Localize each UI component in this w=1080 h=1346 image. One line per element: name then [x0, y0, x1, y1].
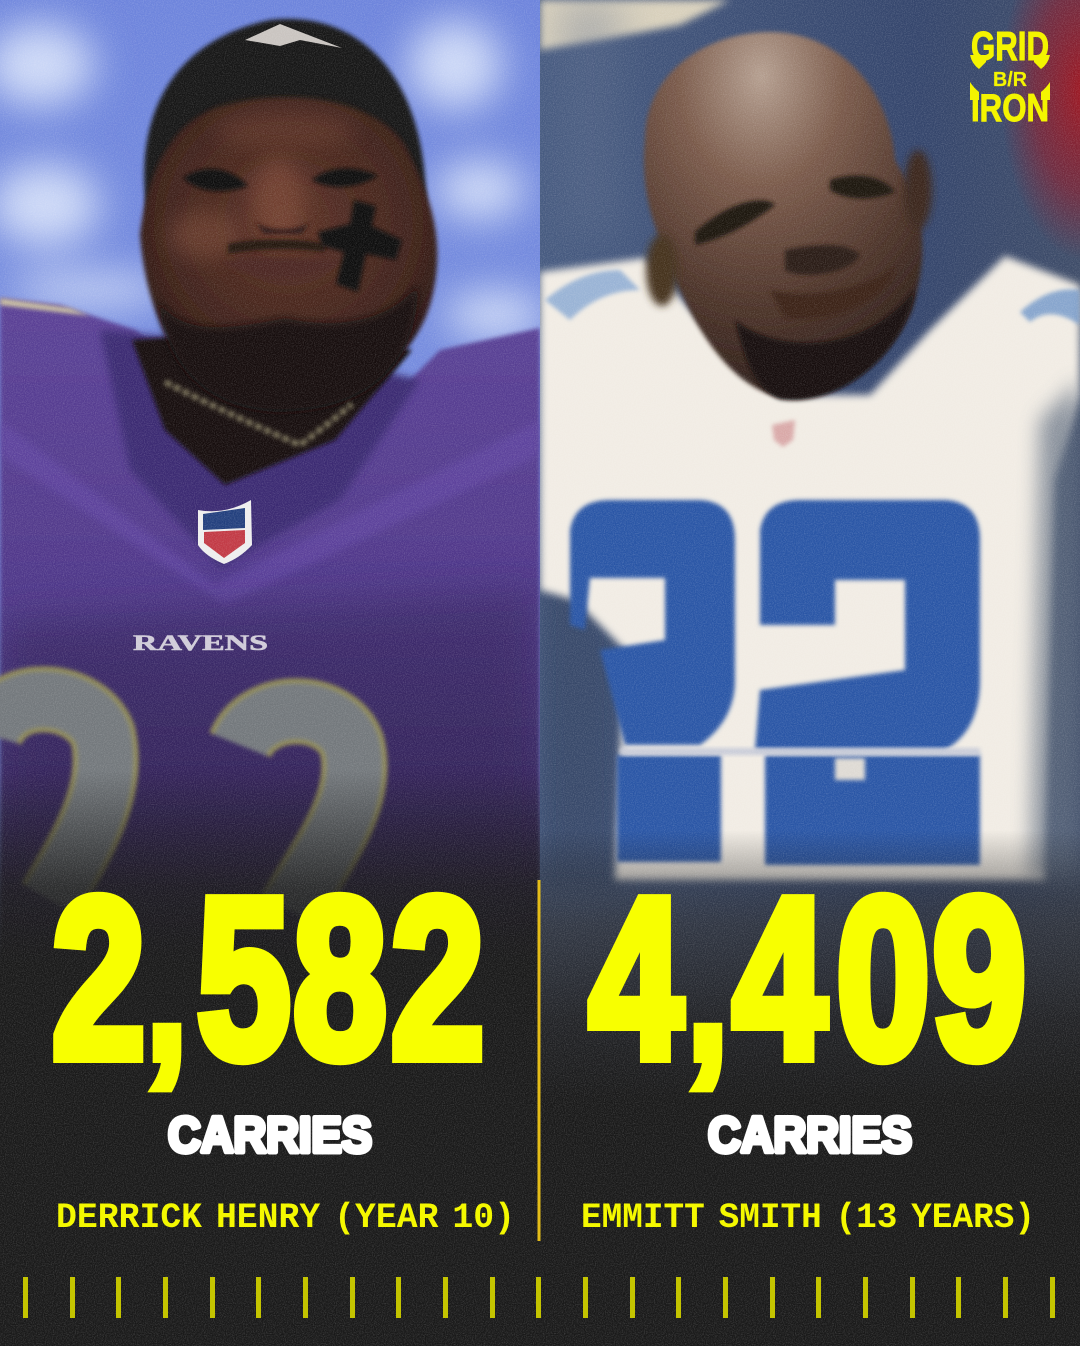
- icon: eye black cross: [318, 200, 402, 292]
- center divider: [538, 880, 540, 1241]
- logo: Grid Iron B/R: GRID: [971, 23, 1049, 69]
- necklace: [165, 382, 352, 445]
- number: 2,582: 2: [52, 850, 146, 1106]
- player caption: EMMITT SMITH (13 YEARS): [581, 1198, 1035, 1238]
- logo: Grid Iron B/R: B/R: [993, 69, 1028, 91]
- logo: Grid Iron B/R: [970, 23, 1050, 130]
- head: [644, 32, 922, 398]
- jersey: [0, 298, 540, 960]
- collar shield: [772, 420, 795, 447]
- durag logo: [245, 24, 342, 48]
- jersey numbers: [570, 500, 980, 865]
- label: carries: CARRIES: [168, 1107, 372, 1163]
- face: [136, 96, 441, 351]
- number: 2,582: 2: [391, 850, 485, 1106]
- player caption: DERRICK HENRY (YEAR 10): [56, 1198, 515, 1238]
- panel: Derrick Henry photo: [0, 0, 545, 965]
- yard-line ticks: [23, 1277, 1055, 1318]
- neck: [132, 330, 412, 485]
- logo: Grid Iron B/R: IRON: [971, 87, 1049, 130]
- number: 4,409: 4: [733, 850, 826, 1106]
- jersey: [540, 256, 1080, 880]
- icon: NFL shield: [198, 500, 252, 564]
- stat: Derrick Henry: [52, 850, 515, 1238]
- number: 2,582: 8: [293, 850, 387, 1106]
- stat: Emmitt Smith: [581, 850, 1035, 1238]
- ears: [646, 234, 678, 306]
- label: carries: CARRIES: [708, 1107, 912, 1163]
- highlights: [252, 158, 304, 242]
- jersey wordmark: RAVENS: [133, 630, 268, 655]
- number: 4,409: 9: [932, 850, 1026, 1106]
- number: 4,409: 4: [589, 850, 683, 1106]
- jersey numbers: [0, 699, 355, 910]
- panel: Emmitt Smith photo: [540, 0, 1080, 1100]
- durag: [144, 19, 426, 240]
- number: 2,582: ,: [147, 886, 186, 1098]
- facial features: [695, 176, 915, 400]
- beard: [153, 286, 422, 396]
- number: 4,409: ,: [688, 886, 727, 1098]
- number: 2,582: 5: [197, 850, 291, 1106]
- eyes and mouth: [182, 166, 378, 264]
- sleeve stripes: [545, 270, 640, 320]
- number: 4,409: 0: [836, 850, 930, 1106]
